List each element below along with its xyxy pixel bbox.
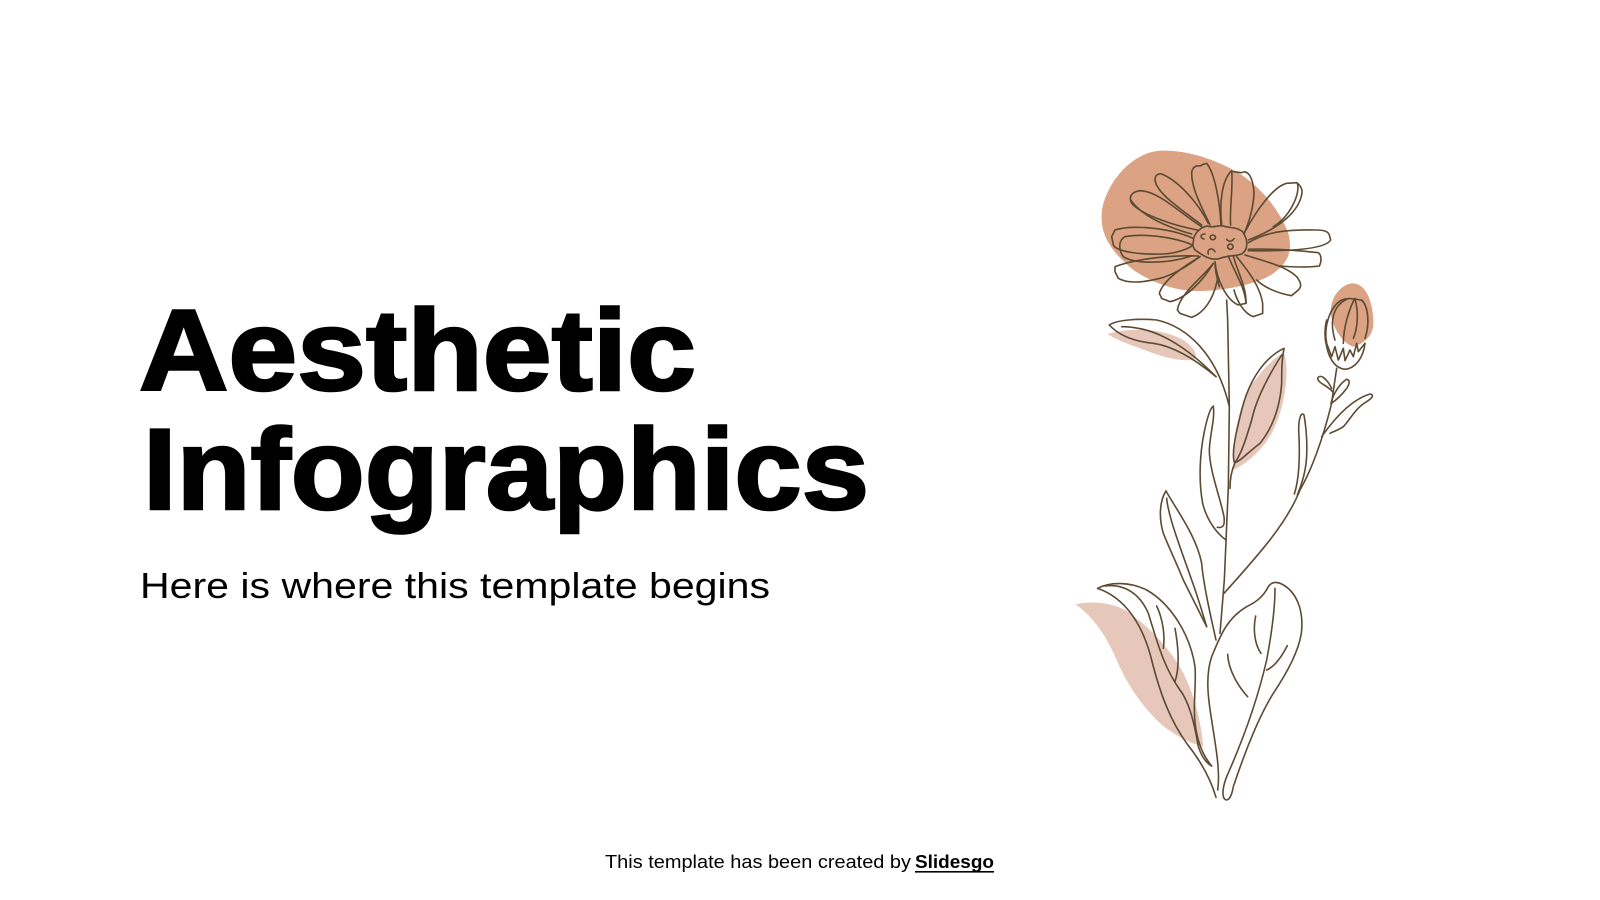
bud outline xyxy=(1326,298,1368,343)
footer credit: Slidesgo xyxy=(915,851,994,872)
blush: right leaf xyxy=(1233,353,1287,470)
title: Infographics xyxy=(143,406,869,534)
title: Aesthetic xyxy=(139,287,696,415)
footer credit: This template has been created by xyxy=(605,851,912,872)
floral illustration xyxy=(1076,151,1373,800)
subtitle: Here is where this template begins xyxy=(140,565,770,606)
blob: flower colour patch xyxy=(1102,151,1290,291)
blush: lower leaf xyxy=(1076,602,1203,747)
stem, leaves and branch xyxy=(1107,319,1372,640)
lower leaves xyxy=(1076,582,1302,800)
flower head and bud xyxy=(1102,151,1373,347)
flower petals outline xyxy=(1112,163,1331,320)
blush: upper leaf xyxy=(1107,330,1196,360)
title xyxy=(139,287,869,534)
blob: bud colour patch xyxy=(1331,283,1373,347)
